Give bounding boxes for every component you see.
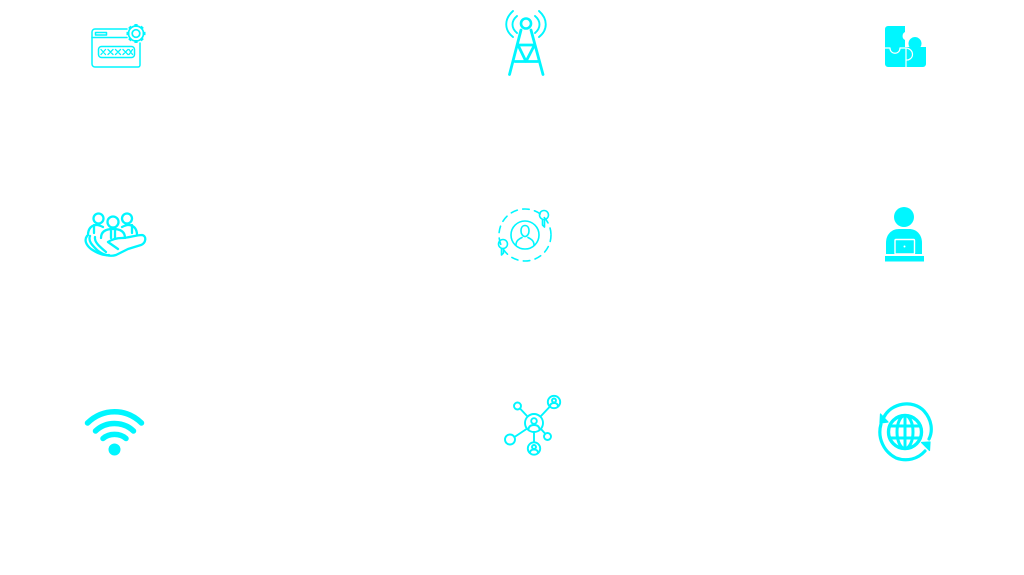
icon: globe with refresh arrows [880,404,931,460]
icon: puzzle pieces [885,26,926,67]
icon: radio tower [506,11,546,74]
icon: password window with gear [92,24,146,67]
icon: person at laptop [885,207,924,262]
icon: user with keys in dashed ring [498,209,551,261]
icon: people in a hand [86,214,145,256]
icon: wifi signal [88,412,142,456]
icon: user network [505,396,560,455]
